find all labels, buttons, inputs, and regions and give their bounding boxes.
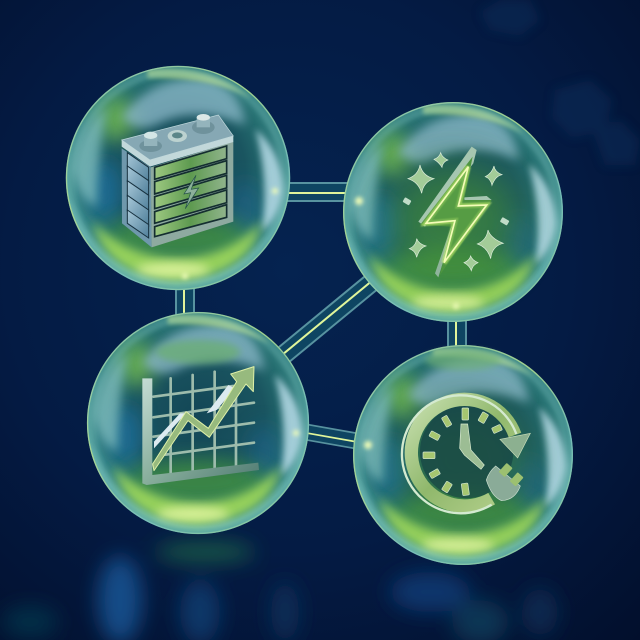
decorative hexagons top right — [480, 0, 640, 165]
connector: chart to clock — [300, 431, 364, 443]
bubble: clock and plug — [351, 345, 575, 565]
glass sphere: lightning — [341, 102, 565, 322]
glass sphere: battery — [64, 66, 292, 290]
glass sphere: chart — [85, 312, 311, 534]
icon: lightning bolt with sparkles — [402, 147, 509, 277]
glass sphere: clock — [351, 345, 575, 565]
battery terminals — [139, 114, 215, 152]
bubble: rising chart — [85, 312, 311, 534]
connector: battery to chart — [184, 280, 185, 325]
connector: battery to lightning — [270, 192, 365, 193]
floor reflections — [2, 542, 558, 640]
connector: lightning to clock — [456, 310, 457, 355]
bubble: lightning — [341, 102, 565, 322]
bubble: battery — [64, 66, 292, 290]
icon: battery — [122, 114, 233, 247]
connector: lightning to chart — [281, 272, 383, 357]
connector glow points — [182, 188, 459, 449]
plug — [486, 463, 524, 501]
icon: line chart with arrow — [142, 367, 259, 485]
icon: clock with charging plug — [402, 395, 530, 513]
